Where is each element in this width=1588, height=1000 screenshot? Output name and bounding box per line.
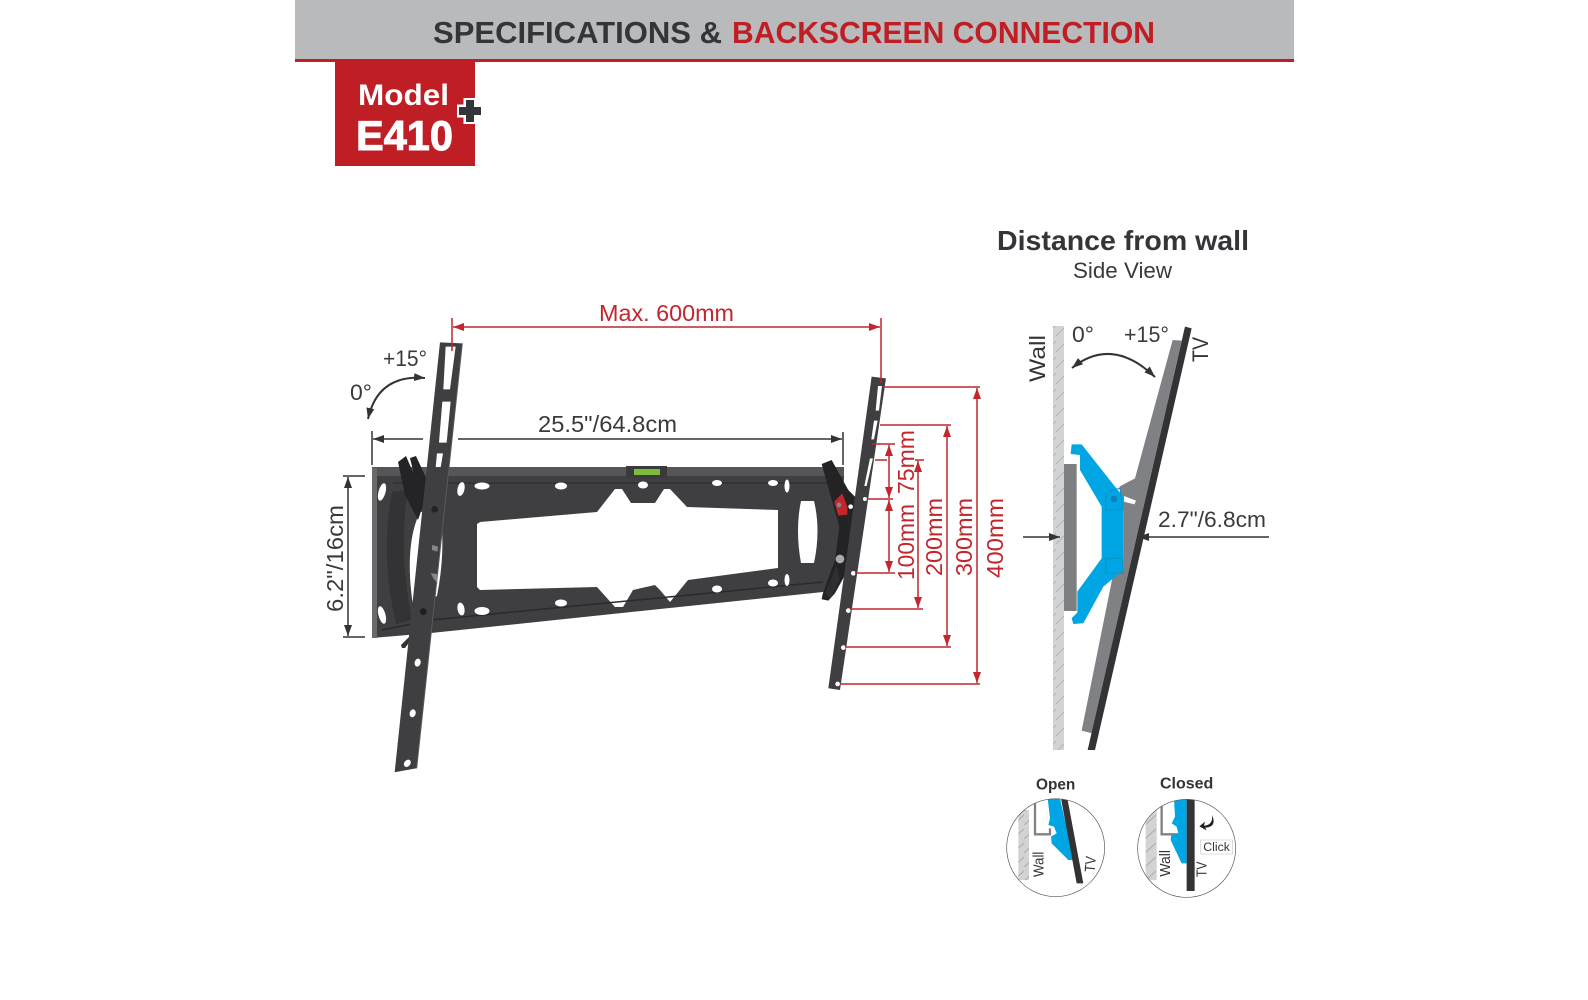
wall plate (1064, 464, 1077, 611)
wall (1053, 326, 1064, 750)
mounting slots (376, 480, 790, 625)
tilt angle label front view: +15° (383, 346, 427, 371)
dimension: 2.7in: 2.7"/6.8cm (1158, 507, 1266, 532)
arrow: tilt (1072, 354, 1155, 377)
heading: distance from wall: Side View (1073, 258, 1172, 283)
dimension: height 6.2in (322, 476, 365, 637)
icon: plus (457, 98, 483, 124)
label: 200mm: 200mm (921, 498, 947, 576)
left lens opening (410, 510, 442, 606)
open detail: Open (1036, 776, 1075, 793)
header bar (295, 0, 1294, 62)
open detail: TV (1083, 855, 1100, 873)
tilt angle label front view (350, 346, 427, 419)
label: 100mm: 100mm (893, 504, 919, 580)
right clamps (822, 460, 862, 601)
tilt angle label front view: 0° (350, 380, 372, 405)
right lens opening (798, 501, 818, 563)
circle: closed (1146, 798, 1195, 891)
right mounting strip (828, 377, 886, 690)
dimension: width 25.5in (372, 411, 843, 465)
dimension: max 600mm: Max. 600mm (599, 300, 734, 326)
model badge (335, 62, 483, 166)
TV panel (1088, 327, 1192, 750)
model badge: E410 (356, 112, 453, 159)
label: TV: TV (1188, 337, 1213, 362)
label: +15 degrees: +15° (1124, 322, 1169, 347)
title (433, 15, 1155, 50)
closed detail: Click (1203, 840, 1231, 854)
circle: open (1018, 798, 1083, 883)
wall bracket front view (372, 342, 886, 772)
label: 0 degrees: 0° (1072, 322, 1094, 347)
model badge: Model (358, 79, 449, 112)
label: wall: Wall (1025, 335, 1050, 382)
side view diagram (1023, 322, 1269, 750)
label: 400mm: 400mm (982, 498, 1008, 578)
dimension: height 6.2in: 6.2"/16cm (322, 505, 348, 612)
spirit level (626, 466, 667, 478)
blue tilt arm (1071, 444, 1123, 624)
click label (1201, 840, 1233, 854)
dimension: max 600mm (452, 300, 881, 383)
closed detail: TV (1195, 861, 1211, 877)
label: 75mm: 75mm (893, 430, 919, 494)
heading: distance from wall (997, 225, 1249, 283)
closed detail: Closed (1160, 775, 1213, 792)
arrow: tilt (368, 378, 425, 419)
left mounting strip (395, 342, 462, 772)
title: BACKSCREEN CONNECTION (732, 15, 1155, 50)
closed detail: Wall (1158, 850, 1174, 877)
closed detail (1138, 775, 1236, 897)
VESA dimensions (840, 387, 1008, 684)
label: 300mm: 300mm (951, 498, 977, 576)
dimension: width 25.5in: 25.5"/64.8cm (538, 411, 677, 437)
icon: red tilt knob (834, 493, 847, 516)
icon: click arrow (1199, 815, 1214, 830)
left clamps (398, 456, 428, 520)
title: SPECIFICATIONS & (433, 15, 722, 50)
wall plate (372, 467, 844, 638)
grey bracket arm (1082, 340, 1182, 733)
heading: distance from wall: Distance from wall (997, 225, 1249, 256)
open detail: Wall (1031, 852, 1047, 877)
open detail (1007, 776, 1105, 897)
